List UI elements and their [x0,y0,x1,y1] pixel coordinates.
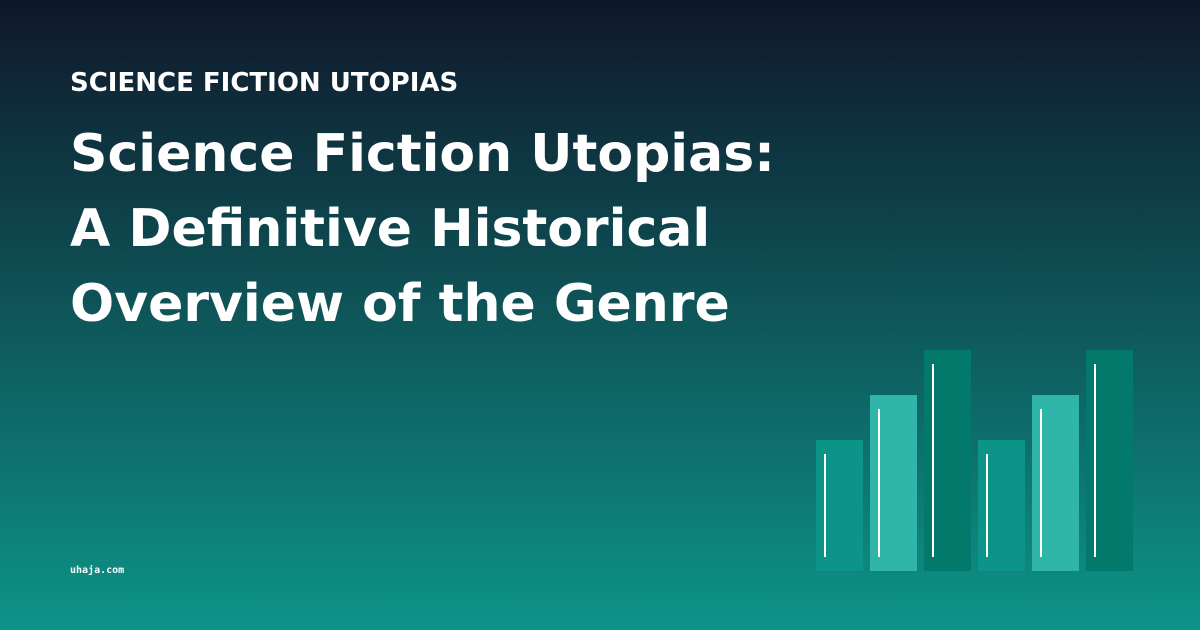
footer site name: uhaja.com [70,565,124,576]
title: Overview of the Genre [70,274,730,334]
title: A Definitive Historical [70,199,710,259]
eyebrow heading: SCIENCE FICTION UTOPIAS [70,68,458,98]
title: Science Fiction Utopias: [70,124,775,184]
title [70,124,775,334]
